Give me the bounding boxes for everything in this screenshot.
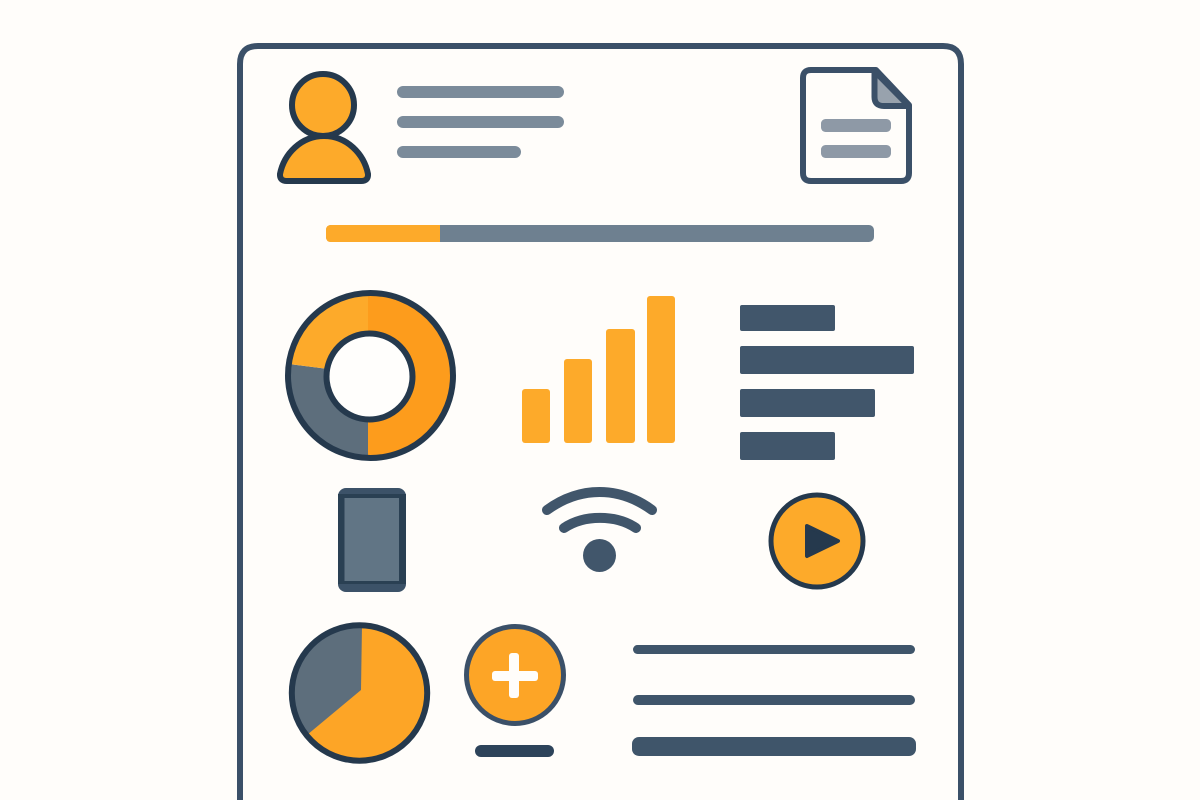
text placeholder lines: footer xyxy=(632,645,916,756)
panel: document frame xyxy=(240,46,961,800)
bar chart: horizontal xyxy=(740,305,914,460)
pie slate slice xyxy=(292,625,362,735)
label placeholder under add button xyxy=(475,745,554,757)
icon: user avatar xyxy=(280,74,368,181)
pie chart xyxy=(292,625,428,761)
icon: wifi xyxy=(547,492,652,572)
donut chart xyxy=(288,293,453,458)
pie outline xyxy=(292,625,427,761)
icon: add button xyxy=(466,626,564,724)
donut hole xyxy=(326,334,412,420)
icon: play button xyxy=(771,495,863,587)
segment: light orange xyxy=(289,293,368,374)
icon: document xyxy=(803,70,909,181)
pie base xyxy=(292,625,428,761)
segment: slate xyxy=(288,364,368,458)
bar chart: vertical xyxy=(522,296,675,443)
text placeholder lines: header xyxy=(397,86,564,158)
progress bar xyxy=(326,225,874,242)
segment: dark orange half xyxy=(368,293,450,458)
icon: phone xyxy=(338,488,406,592)
donut outer ring xyxy=(288,293,453,458)
